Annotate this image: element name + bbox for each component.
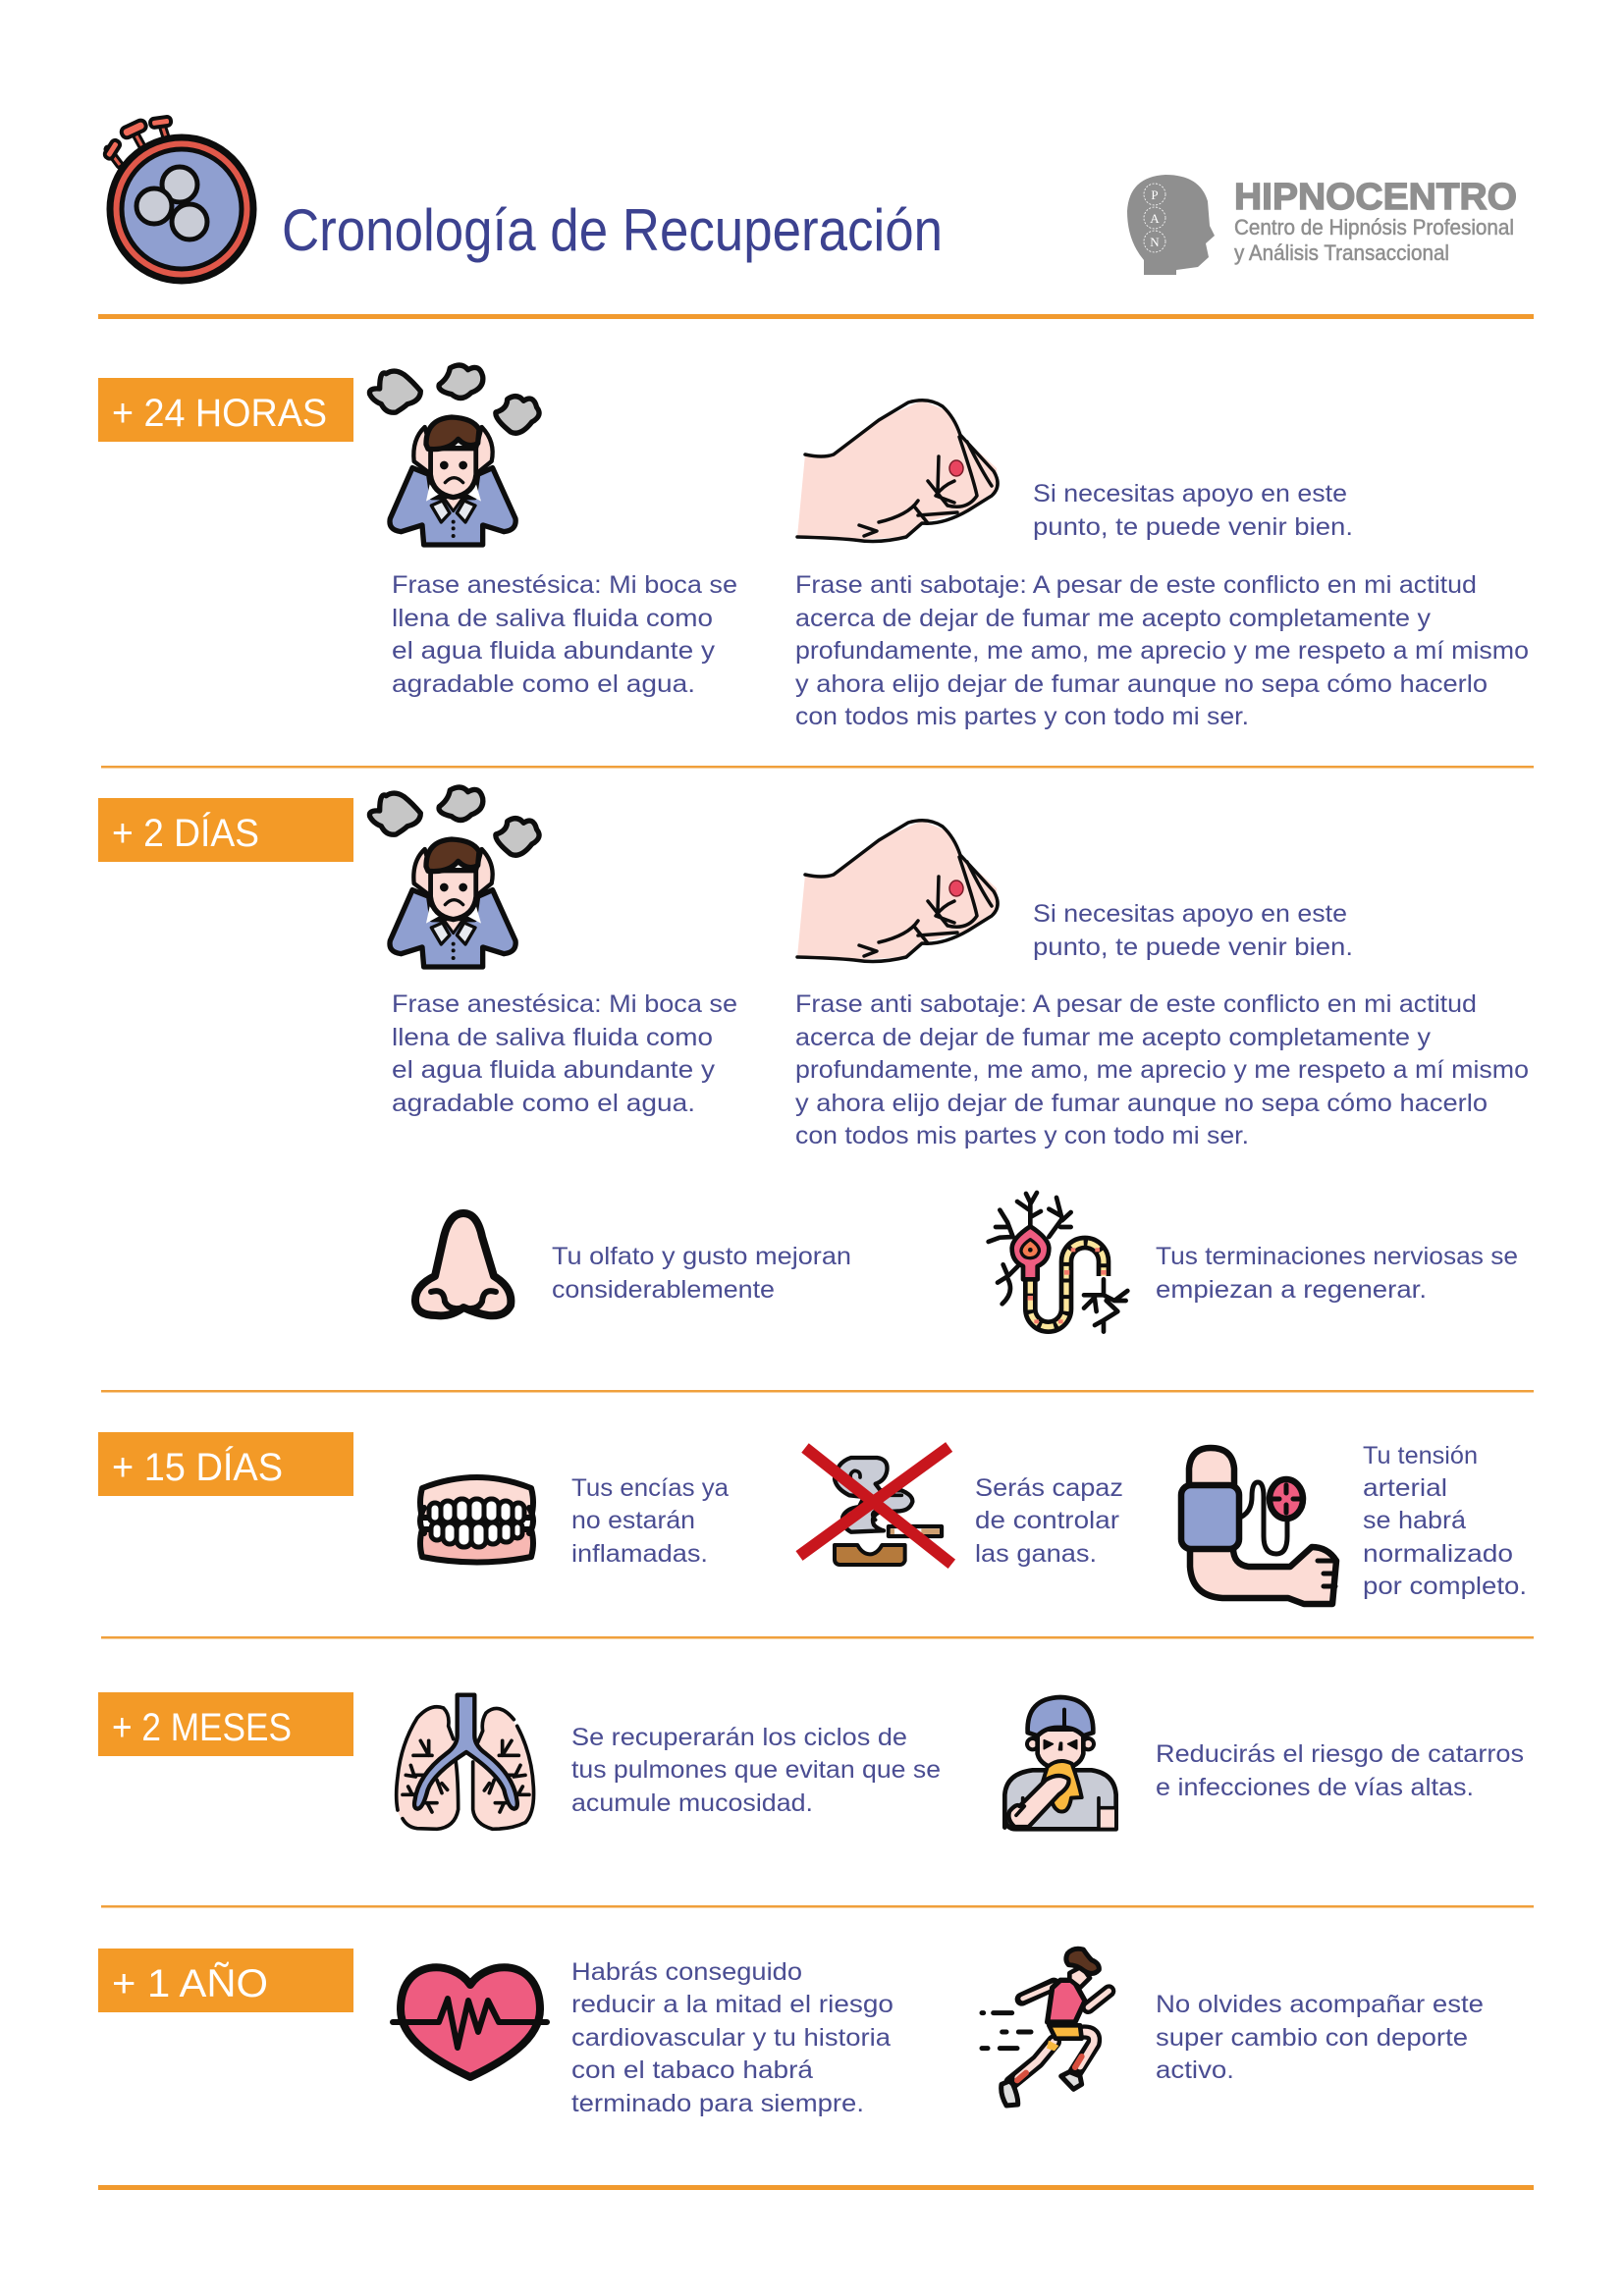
text: frase anti sabotaje: y ahora elijo dejar de fumar aunque no sepa cómo hacerlo <box>795 670 1488 698</box>
text: frase anestésica <box>392 571 737 698</box>
text: frase anti sabotaje <box>795 571 1529 730</box>
text: terminaciones: empiezan a regenerar. <box>1156 1276 1427 1304</box>
text: frase anti sabotaje: con todos mis partes y con todo mi ser. <box>795 1122 1249 1149</box>
text: ganas: de controlar <box>975 1507 1119 1534</box>
icon: head silhouette <box>1127 175 1215 275</box>
icon: runner <box>982 1949 1109 2106</box>
text: terminaciones: Tus terminaciones nerviosas se <box>1156 1243 1518 1270</box>
icon: crossed-out cigarette <box>799 1447 951 1565</box>
text: olfato <box>552 1243 851 1304</box>
text: frase anti sabotaje: acerca de dejar de fumar me acepto completamente y <box>795 605 1432 632</box>
text: terminaciones <box>1156 1243 1518 1304</box>
text: catarros: Reducirás el riesgo de catarros <box>1156 1740 1524 1768</box>
text: frase anestésica: agradable como el agua. <box>392 1090 695 1117</box>
label: +24 horas <box>98 378 353 442</box>
icon: heart with pulse <box>393 1967 547 2077</box>
text: frase anti sabotaje: profundamente, me amo, me aprecio y me respeto a mí mismo <box>795 637 1529 665</box>
text: tensión: arterial <box>1363 1474 1447 1502</box>
text: frase anestésica: Frase anestésica: Mi boca se <box>392 571 737 599</box>
text: catarros <box>1156 1740 1524 1801</box>
label: +15 días: + 15 DÍAS <box>112 1445 283 1489</box>
icon: teeth <box>420 1477 533 1563</box>
text: frase anestésica: llena de saliva fluida como <box>392 1024 713 1051</box>
label: +1 año <box>98 1949 353 2012</box>
text: frase anti sabotaje <box>795 990 1529 1149</box>
text: frase anestésica: el agua fluida abundante y <box>392 637 716 665</box>
icon: blood pressure arm <box>1181 1448 1336 1604</box>
logo text <box>1234 177 1517 265</box>
icon: fist pressure point <box>797 821 999 961</box>
text: cardiovascular <box>571 1958 893 2117</box>
text: tensión: Tu tensión <box>1363 1442 1478 1469</box>
text: pressure point note <box>1033 900 1353 961</box>
icon: nose <box>415 1213 511 1315</box>
text: pulmones: tus pulmones que evitan que se <box>571 1756 941 1784</box>
text: pulmones <box>571 1724 941 1817</box>
text: cardiovascular: Habrás conseguido <box>571 1958 802 1986</box>
text: cardiovascular: reducir a la mitad el riesgo <box>571 1991 893 2018</box>
logo text: Centro de Hipnósis Profesional <box>1234 215 1514 240</box>
text: tensión: normalizado <box>1363 1540 1513 1568</box>
text: pulmones: Se recuperarán los ciclos de <box>571 1724 907 1751</box>
text: tensión: se habrá <box>1363 1507 1466 1534</box>
text: frase anti sabotaje: con todos mis partes y con todo mi ser. <box>795 703 1249 730</box>
text: tensión: por completo. <box>1363 1573 1527 1600</box>
text: frase anestésica: agradable como el agua. <box>392 670 695 698</box>
label: +24 horas: + 24 HORAS <box>112 392 327 435</box>
text: deporte <box>1156 1991 1484 2084</box>
text: ganas: las ganas. <box>975 1540 1097 1568</box>
text: pressure point note: punto, te puede venir bien. <box>1033 513 1353 541</box>
text: encías: no estarán <box>571 1507 695 1534</box>
text: frase anti sabotaje: y ahora elijo dejar de fumar aunque no sepa cómo hacerlo <box>795 1090 1488 1117</box>
icon: coughing man <box>1004 1697 1116 1829</box>
text: cardiovascular: con el tabaco habrá <box>571 2056 813 2084</box>
label: +2 días: + 2 DÍAS <box>112 811 259 855</box>
text: olfato: Tu olfato y gusto mejoran <box>552 1243 851 1270</box>
icon: head silhouette: N <box>1150 235 1160 249</box>
text: cardiovascular: terminado para siempre. <box>571 2090 864 2117</box>
logo: Hipnocentro <box>1127 175 1517 275</box>
text: encías: inflamadas. <box>571 1540 708 1568</box>
back arm and front arm <box>1022 1985 1109 2007</box>
icon: fist pressure point <box>797 400 999 541</box>
text: pulmones: acumule mucosidad. <box>571 1789 813 1817</box>
text: encías <box>571 1474 729 1568</box>
label: +15 días <box>98 1432 353 1496</box>
text: deporte: super cambio con deporte <box>1156 2024 1468 2052</box>
text: encías: Tus encías ya <box>571 1474 729 1502</box>
text: frase anti sabotaje: profundamente, me amo, me aprecio y me respeto a mí mismo <box>795 1056 1529 1084</box>
text: cardiovascular: cardiovascular y tu historia <box>571 2024 891 2052</box>
text: frase anestésica: Frase anestésica: Mi boca se <box>392 990 737 1018</box>
text: deporte: activo. <box>1156 2056 1234 2084</box>
icon: stopwatch <box>103 117 253 281</box>
legs <box>1011 2032 1094 2083</box>
text: olfato: considerablemente <box>552 1276 775 1304</box>
title: Cronología de Recuperación <box>282 197 943 263</box>
label: +2 días <box>98 798 353 862</box>
text: frase anti sabotaje: Frase anti sabotaje: A pesar de este conflicto en mi actitud <box>795 990 1477 1018</box>
icon: worried man <box>369 787 539 967</box>
logo text: y Análisis Transaccional <box>1234 240 1449 265</box>
icon: worried man <box>369 365 539 545</box>
text: catarros: e infecciones de vías altas. <box>1156 1774 1474 1801</box>
text: pressure point note: punto, te puede venir bien. <box>1033 934 1353 961</box>
label: +2 meses <box>98 1692 353 1756</box>
icon: neuron <box>989 1193 1127 1332</box>
text: pressure point note: Si necesitas apoyo en este <box>1033 900 1347 928</box>
text: frase anti sabotaje: acerca de dejar de fumar me acepto completamente y <box>795 1024 1432 1051</box>
text: ganas: Serás capaz <box>975 1474 1123 1502</box>
logo text: HIPNOCENTRO <box>1234 177 1517 218</box>
text: deporte: No olvides acompañar este <box>1156 1991 1484 2018</box>
icon: lungs <box>397 1695 534 1829</box>
text: frase anti sabotaje: Frase anti sabotaje: A pesar de este conflicto en mi actitud <box>795 571 1477 599</box>
label: +1 año: + 1 AÑO <box>112 1961 268 2005</box>
text: tensión <box>1363 1442 1527 1600</box>
icon: head silhouette: A <box>1150 211 1160 226</box>
text: ganas <box>975 1474 1123 1568</box>
label: +2 meses: + 2 MESES <box>112 1706 292 1749</box>
text: pressure point note <box>1033 480 1353 541</box>
text: pressure point note: Si necesitas apoyo en este <box>1033 480 1347 507</box>
text: frase anestésica: llena de saliva fluida como <box>392 605 713 632</box>
text: frase anestésica <box>392 990 737 1117</box>
icon: head silhouette: P <box>1151 187 1159 202</box>
text: frase anestésica: el agua fluida abundante y <box>392 1056 716 1084</box>
